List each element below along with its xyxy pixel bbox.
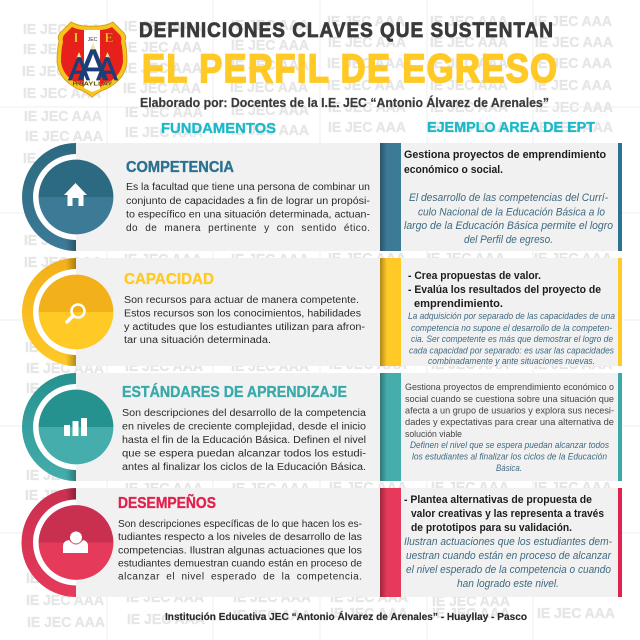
- watermark: IE JEC AAA: IE JEC AAA: [328, 120, 407, 136]
- watermark: IE JEC AAA: IE JEC AAA: [427, 251, 506, 267]
- text: competencia note: del Perfil de egreso.: [464, 234, 553, 246]
- watermark: IE JEC AAA: IE JEC AAA: [535, 100, 614, 116]
- text: capacidad definition: [124, 295, 365, 346]
- watermark: IE JEC AAA: IE JEC AAA: [233, 608, 312, 624]
- watermark: IE JEC AAA: IE JEC AAA: [124, 40, 203, 56]
- logo: school shield: A: [96, 51, 118, 87]
- watermark: IE JEC AAA: IE JEC AAA: [127, 612, 206, 628]
- watermark: IE JEC AAA: IE JEC AAA: [125, 105, 204, 121]
- text: estándares definition: en niveles de creciente complejidad, desde el inicio: [122, 422, 366, 432]
- watermark: IE JEC AAA: IE JEC AAA: [329, 480, 408, 496]
- text: desempeños definition: estudiantes demuestran cuando están en proceso de: [118, 558, 362, 570]
- text: competencia note: culo Nacional de la Educación Básica a lo: [418, 206, 605, 218]
- text: estándares definition: [122, 408, 366, 473]
- text: estándares example: afecta a un grupo de usuarios y explora sus necesi-: [405, 406, 614, 416]
- watermark: IE JEC AAA: IE JEC AAA: [535, 35, 614, 51]
- text: estándares definition: Son descripciones del desarrollo de la competencia: [122, 408, 366, 419]
- text: competencia example: económico o social.: [404, 164, 503, 176]
- watermark: IE JEC AAA: IE JEC AAA: [123, 81, 202, 97]
- watermark: IE JEC AAA: IE JEC AAA: [231, 103, 310, 119]
- watermark: IE JEC AAA: IE JEC AAA: [24, 233, 103, 249]
- text: estándares note: Básica.: [496, 463, 522, 474]
- panel: capacidad: [22, 258, 622, 366]
- watermark: IE JEC AAA: IE JEC AAA: [23, 151, 102, 167]
- ring and circle: desempeños: [21, 488, 113, 597]
- watermark: IE JEC AAA: IE JEC AAA: [328, 251, 407, 267]
- watermark: IE JEC AAA: IE JEC AAA: [125, 125, 204, 141]
- text: desempeños note: uestran cuando están en proceso de alcanzar: [406, 550, 612, 562]
- logo: school shield: I: [73, 31, 79, 46]
- watermark: IE JEC AAA: IE JEC AAA: [430, 14, 509, 30]
- ring and circle: competencia: [22, 143, 113, 251]
- watermark: IE JEC AAA: IE JEC AAA: [329, 357, 408, 373]
- icon: person: [63, 532, 88, 553]
- watermark: IE JEC AAA: IE JEC AAA: [429, 120, 508, 136]
- watermark: IE JEC AAA: IE JEC AAA: [534, 78, 613, 94]
- text: competencia definition: conjunto de capacidades a fin de lograr un propósi-: [126, 196, 370, 207]
- watermark: IE JEC AAA: IE JEC AAA: [27, 615, 106, 631]
- watermark: IE JEC AAA: IE JEC AAA: [537, 606, 616, 622]
- logo: school shield: HUAYLLAY: [72, 82, 113, 88]
- watermark: IE JEC AAA: IE JEC AAA: [24, 109, 103, 125]
- watermark: IE JEC AAA: IE JEC AAA: [535, 120, 614, 136]
- watermark: IE JEC AAA: IE JEC AAA: [231, 38, 310, 54]
- watermark: IE JEC AAA: IE JEC AAA: [23, 86, 102, 102]
- heading: desempeños: DESEMPEÑOS: [118, 494, 216, 512]
- text: capacidad note: La adquisición por separado de las capacidades de una: [408, 311, 615, 321]
- watermark: IE JEC AAA: IE JEC AAA: [328, 100, 407, 116]
- text: capacidad note: competencia no supone el desarrollo de la competen-: [411, 323, 612, 333]
- panel: competencia: [22, 143, 622, 251]
- logo: school shield: JEC: [88, 37, 98, 43]
- text: competencia definition: do de manera pertinente y con sentido ético.: [126, 223, 370, 234]
- text: capacidad example: - Crea propuestas de valor.: [408, 270, 541, 282]
- watermark: IE JEC AAA: IE JEC AAA: [125, 481, 204, 497]
- text: desempeños definition: tudiantes respecto a los niveles de desarrollo de las: [118, 532, 362, 543]
- text: capacidad note: [408, 311, 615, 366]
- footer: Institución Educativa JEC “Antonio Álvarez de Arenales” - Huayllay - Pasco: [165, 610, 527, 623]
- watermark: IE JEC AAA: IE JEC AAA: [23, 42, 102, 58]
- text: desempeños note: el nivel esperado de la competencia o cuando: [406, 564, 611, 576]
- text: competencia note: [404, 192, 613, 246]
- heading: competencia: COMPETENCIA: [126, 159, 234, 176]
- watermark: IE JEC AAA: IE JEC AAA: [26, 593, 105, 609]
- icon: bar chart: [64, 418, 87, 436]
- text: competencia definition: to específico en una situación determinada, actuan-: [126, 210, 370, 220]
- watermark: IE JEC AAA: IE JEC AAA: [26, 571, 105, 587]
- heading: capacidad: CAPACIDAD: [124, 271, 214, 288]
- text: estándares note: los estudiantes al finalizar los ciclos de la Educación: [412, 452, 607, 462]
- watermark: IE JEC AAA: IE JEC AAA: [327, 78, 406, 94]
- watermark: IE JEC AAA: IE JEC AAA: [534, 357, 613, 373]
- watermark: IE JEC AAA: IE JEC AAA: [231, 252, 310, 268]
- text: competencia note: El desarrollo de las competencias del Currí-: [409, 192, 608, 204]
- watermark: IE JEC AAA: IE JEC AAA: [25, 129, 104, 145]
- text: competencia definition: [126, 182, 370, 234]
- watermark: IE JEC AAA: IE JEC AAA: [330, 590, 409, 606]
- band: competencia: [380, 143, 401, 251]
- panel: estándares de aprendizaje: [22, 373, 622, 481]
- watermark: IE JEC AAA: IE JEC AAA: [25, 488, 104, 504]
- watermark: IE JEC AAA: IE JEC AAA: [430, 35, 509, 51]
- watermark: IE JEC AAA: IE JEC AAA: [25, 340, 104, 356]
- watermark: IE JEC AAA: IE JEC AAA: [231, 123, 310, 139]
- watermark: IE JEC AAA: IE JEC AAA: [124, 61, 203, 77]
- watermark: IE JEC AAA: IE JEC AAA: [230, 80, 309, 96]
- text: desempeños example: - Plantea alternativas de propuesta de: [404, 494, 592, 506]
- text: capacidad definition: y actitudes que los estudiantes utilizan para afron-: [124, 322, 365, 333]
- subtitle: authors: Elaborado por: Docentes de la I.E. JEC “Antonio Álvarez de Arenales”: [140, 95, 549, 110]
- text: desempeños note: Ilustran actuaciones que los estudiantes dem-: [404, 536, 612, 548]
- text: competencia note: largo de la Educación Básica permite el logro: [404, 220, 613, 232]
- watermark: IE JEC AAA: IE JEC AAA: [430, 100, 509, 116]
- watermark: IE JEC AAA: IE JEC AAA: [26, 361, 105, 377]
- logo: school shield: [57, 22, 127, 97]
- watermark: IE JEC AAA: IE JEC AAA: [534, 14, 613, 30]
- watermark: IE JEC AAA: IE JEC AAA: [327, 56, 406, 72]
- watermark: IE JEC AAA: IE JEC AAA: [431, 357, 510, 373]
- text: desempeños definition: competencias. Ilustran algunas actuaciones que los: [118, 546, 362, 556]
- band: desempeños: [380, 488, 401, 597]
- watermark: IE JEC AAA: IE JEC AAA: [430, 78, 509, 94]
- watermark: IE JEC AAA: IE JEC AAA: [26, 468, 105, 484]
- text: capacidad definition: Estos recursos son los conocimientos, habilidades: [124, 308, 361, 320]
- text: estándares example: Gestiona proyectos de emprendimiento económico o: [405, 382, 614, 393]
- text: desempeños note: han logrado este nivel.: [457, 578, 559, 590]
- edge bar: desempeños: [618, 488, 622, 597]
- watermark: IE JEC AAA: IE JEC AAA: [23, 22, 102, 38]
- heading: estándares: ESTÁNDARES DE APRENDIZAJE: [122, 384, 347, 401]
- logo: school shield: A: [78, 41, 109, 90]
- watermark: IE JEC AAA: IE JEC AAA: [534, 251, 613, 267]
- watermark: IE JEC AAA: IE JEC AAA: [330, 606, 409, 622]
- text: estándares definition: que se espera puedan alcanzar todos los estudi-: [122, 448, 366, 460]
- column heading: ejemplo: EJEMPLO AREA DE EPT: [427, 119, 595, 136]
- watermark: IE JEC AAA: IE JEC AAA: [328, 35, 407, 51]
- band: estándares: [380, 373, 401, 481]
- watermark: IE JEC AAA: IE JEC AAA: [124, 252, 203, 268]
- text: estándares note: [410, 440, 609, 474]
- text: estándares definition: hasta el fin de la Educación Básica. Definen el nivel: [122, 435, 366, 446]
- watermark: IE JEC AAA: IE JEC AAA: [24, 255, 103, 271]
- text: desempeños definition: [118, 519, 362, 582]
- text: competencia definition: Es la facultad que tiene una persona de combinar un: [126, 182, 370, 193]
- text: estándares example: social cuando se cuestiona sobre una situación que: [405, 394, 614, 405]
- text: capacidad example: [408, 270, 601, 310]
- watermark: IE JEC AAA: IE JEC AAA: [534, 480, 613, 496]
- watermark: IE JEC AAA: IE JEC AAA: [233, 590, 312, 606]
- watermark: IE JEC AAA: IE JEC AAA: [430, 56, 509, 72]
- ring and circle: estándares: [22, 373, 113, 481]
- text: capacidad example: - Evalúa los resultados del proyecto de: [408, 284, 601, 296]
- text: desempeños note: [404, 536, 612, 590]
- text: desempeños definition: Son descripciones específicas de lo que hacen los es-: [118, 519, 362, 530]
- text: estándares example: solución viable: [405, 429, 462, 440]
- text: estándares example: [405, 382, 614, 440]
- watermark: IE JEC AAA: IE JEC AAA: [126, 590, 205, 606]
- band: capacidad: [380, 258, 401, 366]
- watermark: IE JEC AAA: IE JEC AAA: [231, 359, 310, 375]
- text: estándares definition: antes al finalizar los ciclos de la Educación Básica.: [122, 462, 366, 473]
- watermark: IE JEC AAA: IE JEC AAA: [124, 19, 203, 35]
- title line 2: EL PERFIL DE EGRESO: [142, 46, 557, 91]
- text: capacidad definition: Son recursos para actuar de manera competente.: [124, 295, 359, 306]
- text: competencia example: Gestiona proyectos de emprendimiento: [404, 149, 606, 161]
- edge bar: estándares: [618, 373, 622, 481]
- panel: desempeños: [21, 488, 622, 597]
- edge bar: competencia: [618, 143, 622, 251]
- text: capacidad example: emprendimiento.: [414, 298, 503, 310]
- watermark: IE JEC AAA: IE JEC AAA: [26, 381, 105, 397]
- edge bar: capacidad: [618, 258, 622, 366]
- watermark: IE JEC AAA: IE JEC AAA: [232, 481, 311, 497]
- text: competencia example: [404, 149, 606, 176]
- text: capacidad note: cia. Ser competente es más que demostrar el logro de: [411, 334, 613, 344]
- text: desempeños example: [404, 494, 604, 534]
- icon: house: [64, 183, 87, 206]
- text: estándares example: dades y expectativas para crear una alternativa de: [405, 417, 614, 428]
- watermark: IE JEC AAA: IE JEC AAA: [125, 359, 204, 375]
- text: capacidad note: combinadamente y ante situaciones nuevas.: [428, 356, 595, 366]
- text: estándares note: Definen el nivel que se espera puedan alcanzar todos: [410, 440, 609, 451]
- text: capacidad definition: tar una situación determinada.: [124, 335, 271, 346]
- watermark: IE JEC AAA: IE JEC AAA: [431, 480, 510, 496]
- column heading: fundamentos: FUNDAMENTOS: [161, 120, 276, 137]
- watermark: IE JEC AAA: IE JEC AAA: [534, 56, 613, 72]
- text: desempeños definition: alcanzar el nivel esperado de la competencia.: [118, 572, 362, 582]
- logo: school shield: A: [68, 51, 90, 87]
- text: desempeños example: valor creativas y las representa a través: [411, 508, 604, 520]
- icon: magnifier: [67, 304, 84, 322]
- text: desempeños example: de prototipos para su validación.: [411, 522, 572, 534]
- watermark: IE JEC AAA: IE JEC AAA: [231, 18, 310, 34]
- watermark: IE JEC AAA: IE JEC AAA: [22, 64, 101, 80]
- watermark: IE JEC AAA: IE JEC AAA: [231, 58, 310, 74]
- logo: school shield: E: [104, 31, 114, 46]
- watermark: IE JEC AAA: IE JEC AAA: [327, 14, 406, 30]
- title line 1: DEFINICIONES CLAVES QUE SUSTENTAN: [139, 19, 553, 42]
- watermark: IE JEC AAA: IE JEC AAA: [432, 594, 511, 610]
- text: capacidad note: cada capacidad por separado: es usar las capacidades: [409, 346, 614, 356]
- ring and circle: capacidad: [22, 258, 113, 366]
- watermark: IE JEC AAA: IE JEC AAA: [432, 606, 511, 622]
